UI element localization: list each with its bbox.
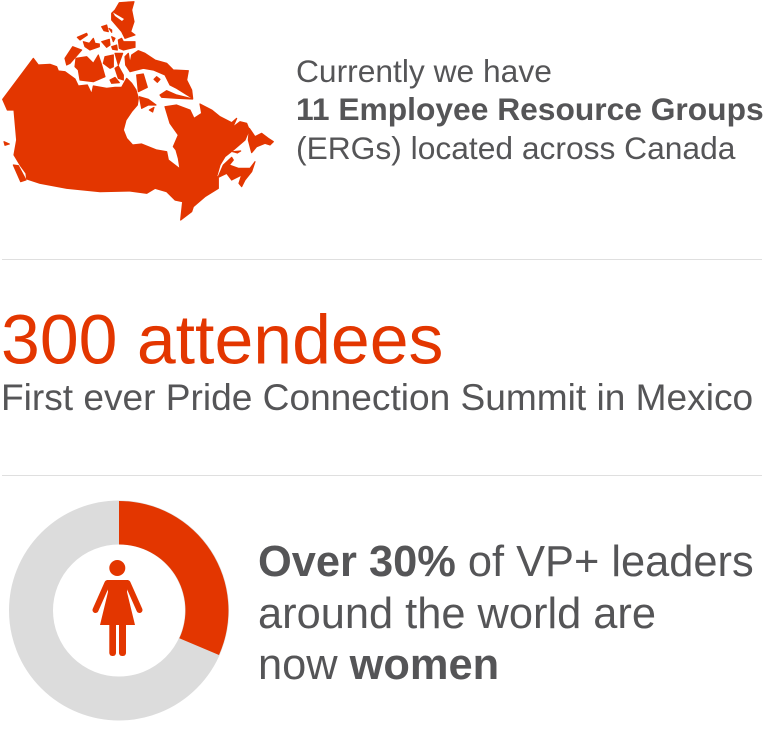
- heading: 300 attendees: 300 attendees: [1, 300, 443, 378]
- text block: employee resource groups: 11 Employee Resource Groups: [296, 91, 764, 127]
- text block: employee resource groups: (ERGs) located across Canada: [296, 130, 736, 166]
- text block: employee resource groups: [296, 53, 764, 166]
- text: summit description: First ever Pride Connection Summit in Mexico: [1, 376, 753, 418]
- map island channel: [113, 12, 124, 21]
- donut chart: over 30 percent: [31, 501, 228, 698]
- text block: VP+ leaders: now women: [258, 641, 499, 689]
- divider: [2, 259, 762, 260]
- text block: VP+ leaders: around the world are: [258, 590, 656, 638]
- text block: employee resource groups: Currently we have: [296, 53, 552, 89]
- icon: map of Canada: [3, 2, 273, 220]
- text block: VP+ leaders: Over 30% of VP+ leaders: [258, 538, 754, 586]
- icon: woman figure: [96, 560, 140, 656]
- text block: VP+ leaders: [258, 538, 754, 689]
- divider: [2, 475, 762, 476]
